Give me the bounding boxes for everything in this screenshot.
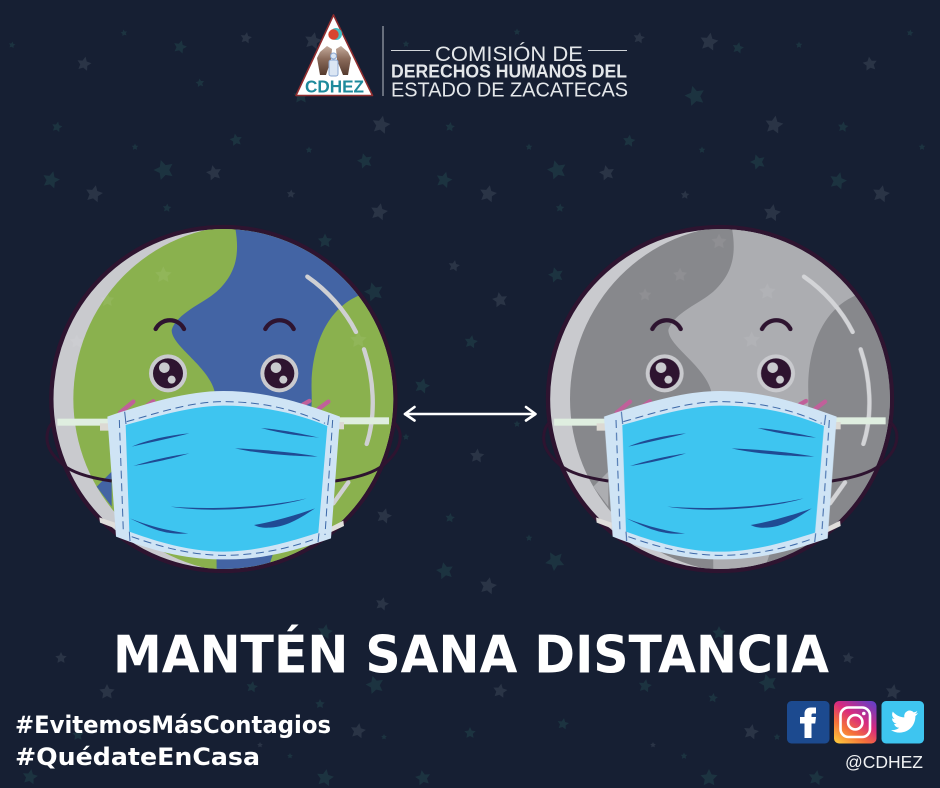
social handle: @CDHEZ	[845, 752, 923, 772]
logo globe	[328, 28, 342, 40]
left eye	[646, 354, 684, 392]
globe: coloured earth with mask	[47, 226, 413, 573]
blush	[120, 401, 328, 413]
organisation name: ESTADO DE ZACATECAS	[391, 80, 628, 102]
icon: twitter	[882, 701, 924, 744]
icon: instagram	[834, 701, 876, 744]
land and ocean	[570, 226, 910, 573]
mask straps	[57, 417, 389, 431]
right eye	[260, 354, 298, 392]
lower mask ties	[596, 517, 841, 533]
organisation name	[391, 43, 628, 102]
logo name: CDHEZ	[305, 76, 364, 96]
title: MANTÉN SANA DISTANCIA	[113, 624, 829, 686]
logo person	[329, 53, 338, 76]
blush	[617, 401, 825, 413]
left eyebrow	[652, 320, 681, 329]
mask straps	[554, 417, 886, 431]
arrow: distance between globes	[405, 407, 536, 420]
land and ocean	[70, 226, 413, 573]
highlights	[307, 277, 373, 503]
highlights	[804, 277, 869, 503]
face mask	[604, 391, 837, 559]
globe body	[548, 227, 892, 571]
logo hands	[317, 46, 351, 75]
left eyebrow	[156, 320, 184, 329]
hashtag: Quédate En Casa: #QuédateEnCasa	[15, 743, 260, 771]
globe: grey earth with mask	[544, 226, 910, 573]
right eyebrow	[265, 320, 294, 329]
logo: CDHEZ triangle	[296, 15, 372, 96]
ear loops	[47, 422, 400, 481]
face mask	[107, 391, 340, 559]
right eyebrow	[762, 320, 790, 329]
logo divider	[382, 26, 384, 96]
lower mask ties	[99, 517, 344, 533]
organisation name: DERECHOS HUMANOS DEL	[391, 62, 627, 82]
right eye	[757, 354, 795, 392]
icon: facebook	[787, 701, 830, 744]
organisation name: COMISIÓN DE	[435, 43, 583, 66]
left eye	[149, 354, 187, 392]
ear loops	[544, 422, 897, 481]
globe body	[51, 227, 395, 571]
hashtag: Evitemos Más Contagios: #EvitemosMásContagios	[15, 711, 331, 739]
